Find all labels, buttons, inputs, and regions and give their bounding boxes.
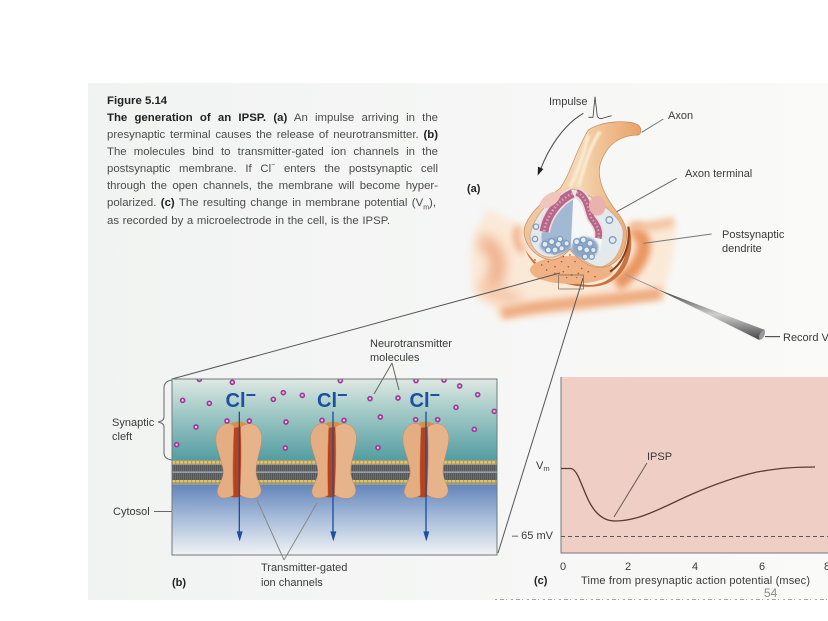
label: neurotransmitter molecules: molecules (370, 352, 420, 364)
cut-away terminal interior (530, 188, 623, 267)
graph plot area (561, 377, 828, 553)
y axis labels: m (543, 464, 550, 473)
IPSP curve (561, 467, 815, 521)
x axis tick labels: 2 (625, 561, 631, 573)
label: impulse: Impulse (549, 96, 588, 108)
page background panel (88, 83, 828, 600)
Cl- ion labels (226, 385, 440, 412)
lipid bilayer membrane (172, 460, 497, 485)
label: transmitter-gated ion channels (257, 500, 347, 589)
resting potential dashed line (561, 536, 828, 538)
label: synaptic cleft: Synaptic (112, 417, 154, 429)
x axis tick labels: 4 (692, 561, 698, 573)
IPSP label (614, 451, 672, 517)
postsynaptic dendrite (471, 208, 675, 320)
label: cytosol (113, 506, 192, 518)
label: neurotransmitter molecules: Neurotransmitter (370, 338, 452, 350)
label: transmitter-gated ion channels: ion channels (261, 577, 323, 589)
text: postsynaptic membrane. If Cl− enters the postsynaptic cell (107, 162, 438, 175)
ion channel 2 (311, 422, 356, 498)
text: as recorded by a microelectrode in the cell, is the IPSP. (107, 215, 390, 227)
axon highlight fibres (570, 132, 600, 187)
text: The generation of an IPSP. (a) An impulse arriving in the (107, 112, 438, 124)
label: postsynaptic dendrite: Postsynaptic (722, 229, 784, 241)
IPSP label: IPSP (647, 451, 672, 463)
impulse direction arrow (538, 113, 583, 176)
x axis title: Time from presynaptic action potential (msec) (581, 575, 810, 587)
text: Figure 5.14 (107, 95, 167, 107)
label: panel c: (c) (534, 575, 548, 587)
neurotransmitter molecules (175, 377, 496, 450)
label: synaptic cleft: cleft (112, 431, 132, 443)
x axis tick labels (560, 561, 828, 573)
text: The molecules bind to transmitter-gated ion channels in the (107, 146, 438, 158)
page number: 54 (764, 586, 778, 600)
x axis tick labels: 6 (759, 561, 765, 573)
label: panel a: (a) (467, 183, 481, 195)
leader: axon (642, 119, 663, 132)
illustration (a): axon terminal on postsynaptic dendrite (471, 97, 780, 341)
leader: axon terminal (617, 178, 677, 212)
zoom lines from inset to panels (172, 273, 583, 553)
synaptic cleft bracket (158, 380, 172, 460)
Cl- ion labels: Cl (317, 390, 337, 412)
label: postsynaptic dendrite: dendrite (722, 243, 762, 255)
Cl- ion labels: − (430, 385, 440, 405)
y axis labels (512, 460, 554, 542)
postsynaptic density with dots (525, 227, 631, 287)
bound transmitter molecules (225, 418, 440, 423)
text: polarized. (c) The resulting change in membrane potential (Vm), (107, 197, 436, 211)
ion channel 3 (403, 422, 449, 498)
Cl- ion labels: Cl (226, 390, 246, 412)
Cl- ion labels: − (337, 385, 348, 405)
recording microelectrode (625, 274, 780, 341)
label: transmitter-gated ion channels: Transmitter-gated (261, 562, 347, 574)
panel (b): synapse membrane diagram (172, 377, 497, 555)
vesicle cluster shading (540, 237, 598, 258)
text: presynaptic terminal causes the release of neurotransmitter. (b) (107, 129, 438, 141)
ion channel 1 (216, 422, 262, 498)
Cl- ion labels: Cl (410, 390, 430, 412)
mitochondria (544, 193, 573, 232)
impulse trace icon (588, 97, 612, 119)
label: axon: Axon (668, 110, 693, 122)
label: panel b: (b) (172, 577, 186, 589)
synaptic vesicles (532, 217, 616, 259)
caption text block (107, 95, 438, 227)
text: through the open channels, the membrane will become hyper- (107, 180, 438, 192)
label: neurotransmitter molecules (370, 338, 452, 394)
cut-off text tops at page bottom (495, 598, 828, 600)
x axis tick labels: 0 (560, 561, 566, 573)
leader: postsynaptic dendrite (643, 234, 712, 243)
y axis labels: V (536, 460, 543, 472)
y axis labels: – 65 mV (512, 530, 554, 542)
Cl- ion labels: − (246, 385, 256, 405)
axon and terminal bulb (524, 122, 641, 268)
label: record Vm: Record V (783, 332, 828, 344)
chloride flow arrows (237, 412, 429, 541)
inset square on synapse (559, 275, 583, 289)
label: axon terminal: Axon terminal (685, 168, 752, 180)
label: cytosol: Cytosol (113, 506, 150, 518)
panel (c): IPSP graph (512, 377, 828, 587)
